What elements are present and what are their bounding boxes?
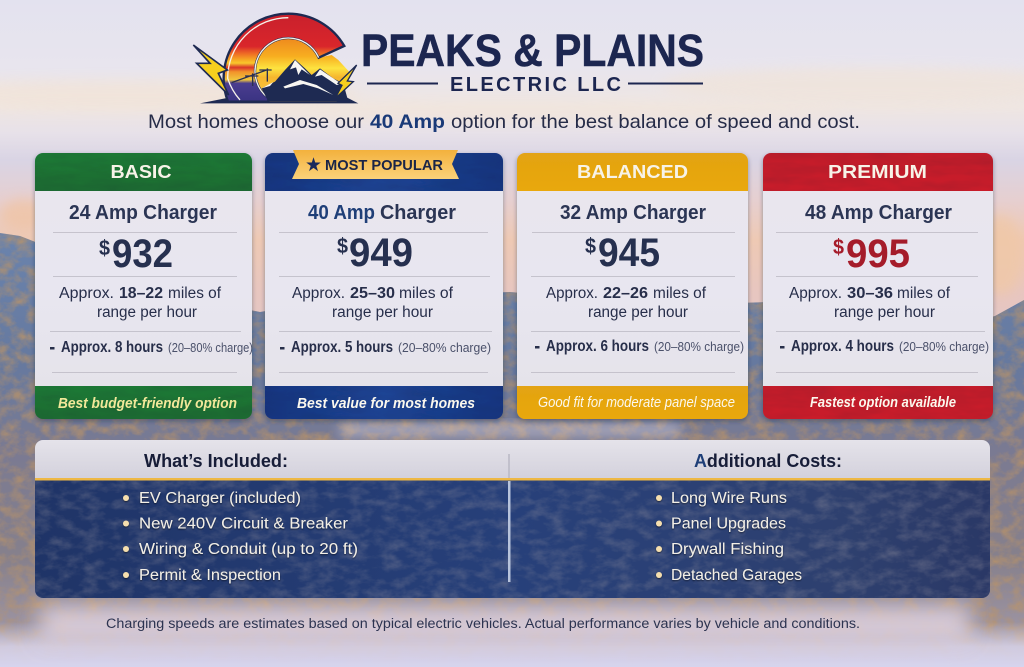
logo sun disc and streak xyxy=(255,38,350,102)
40 amp: text: range per hour xyxy=(332,304,433,321)
subtitle: 40 Amp xyxy=(370,111,445,133)
logo C ring xyxy=(224,14,344,102)
centre divider xyxy=(508,454,510,478)
basic: text: 24 Amp Charger xyxy=(69,202,217,224)
basic: text: 18–22 xyxy=(119,285,163,302)
logo wordmark: ELECTRIC LLC xyxy=(450,74,621,96)
footer band xyxy=(35,386,252,419)
what's included list: Wiring & Conduit (up to 20 ft) xyxy=(139,541,358,558)
what's included heading: What’s Included: xyxy=(144,450,288,471)
subtitle: Most homes choose our xyxy=(148,111,365,133)
premium: text: (20–80% charge) xyxy=(899,340,989,354)
balanced: text: (20–80% charge) xyxy=(654,340,744,354)
logo left lightning bolt xyxy=(193,45,229,95)
basic: text: (20–80% charge) xyxy=(168,341,253,355)
card: basic xyxy=(35,153,252,419)
40 amp: text: 949 xyxy=(349,231,413,275)
gold rule xyxy=(35,478,990,480)
balanced: text: BALANCED xyxy=(577,161,688,182)
logo ring white lines xyxy=(228,18,319,100)
premium: text xyxy=(776,161,989,411)
basic: text: Approx. 8 hours xyxy=(61,339,163,356)
balanced: text: Good fit for moderate panel space xyxy=(538,395,735,411)
premium: text: 995 xyxy=(846,232,910,276)
40 amp: text: Charger xyxy=(380,202,456,224)
card body xyxy=(35,190,252,387)
logo mountains xyxy=(262,59,348,102)
premium: text: 48 Amp Charger xyxy=(805,202,952,224)
what's included list xyxy=(123,490,358,584)
what's included list: EV Charger (included) xyxy=(139,490,301,507)
header band xyxy=(265,153,503,191)
40 amp: text: Approx. 5 hours xyxy=(291,339,393,356)
premium: text: Approx. xyxy=(789,285,842,302)
panel: included and additional costs xyxy=(35,440,990,598)
additional costs list: Long Wire Runs xyxy=(671,490,787,507)
subtitle xyxy=(148,111,860,133)
40 amp: text: Best value for most homes xyxy=(297,396,475,412)
basic: text: Best budget-friendly option xyxy=(58,396,237,412)
additional costs list: Drywall Fishing xyxy=(671,541,784,558)
basic: text xyxy=(50,161,253,412)
logo base wedge xyxy=(200,97,358,103)
40 amp: text: Approx. xyxy=(292,285,345,302)
balanced: text: 22–26 xyxy=(603,285,648,302)
logo power lines xyxy=(232,68,272,86)
premium: text: miles of xyxy=(897,285,951,302)
balanced: text: 32 Amp Charger xyxy=(560,202,706,224)
card body xyxy=(763,190,993,387)
balanced: text: Approx. 6 hours xyxy=(546,338,649,355)
footnote: Charging speeds are estimates based on typical electric vehicles. Actual performance varies by vehicle and conditions. xyxy=(106,616,860,631)
40 amp: text: (20–80% charge) xyxy=(398,341,491,355)
footer band xyxy=(517,386,748,419)
premium: text: 30–36 xyxy=(847,285,893,302)
basic: text: range per hour xyxy=(97,304,197,321)
card body xyxy=(265,190,503,387)
most popular ribbon xyxy=(292,150,459,179)
40 amp: text: 25–30 xyxy=(350,285,395,302)
premium: text: Fastest option available xyxy=(810,395,956,411)
what's included list: Permit & Inspection xyxy=(139,567,281,584)
header band xyxy=(763,153,993,191)
additional costs heading: Additional Costs: xyxy=(694,450,842,471)
additional costs list: Detached Garages xyxy=(671,567,802,584)
card: balanced xyxy=(517,153,748,419)
logo right lightning bolt xyxy=(335,65,357,99)
40 amp: text: $ xyxy=(337,235,348,258)
card: 40 amp most popular xyxy=(265,153,503,419)
40 amp: text: miles of xyxy=(399,285,454,302)
premium: text: $ xyxy=(833,236,844,259)
footer band xyxy=(265,386,503,419)
subtitle: option for the best balance of speed and cost. xyxy=(451,111,860,133)
logo xyxy=(193,14,358,103)
40 amp: text xyxy=(279,202,492,412)
logo wordmark: PEAKS & PLAINS xyxy=(361,25,704,76)
header band xyxy=(35,153,252,191)
what's included list: New 240V Circuit & Breaker xyxy=(139,516,348,532)
premium: text: Approx. 4 hours xyxy=(791,338,894,355)
premium: text: range per hour xyxy=(834,304,935,321)
balanced: text: 945 xyxy=(598,231,660,275)
card: premium xyxy=(763,153,993,419)
basic: text: $ xyxy=(99,237,110,260)
basic: text: 932 xyxy=(112,232,173,276)
footer band xyxy=(763,386,993,419)
most popular ribbon: ★ xyxy=(305,155,322,176)
balanced: text: Approx. xyxy=(546,285,598,302)
header band xyxy=(517,153,748,191)
panel navy body xyxy=(35,480,990,598)
divider glow xyxy=(508,481,510,582)
premium: text: PREMIUM xyxy=(828,161,927,182)
card body xyxy=(517,190,748,387)
balanced: text: range per hour xyxy=(588,304,688,321)
balanced: text: miles of xyxy=(653,285,707,302)
panel header strip xyxy=(35,440,990,479)
40 amp: text: 40 Amp xyxy=(308,202,375,224)
basic: text: Approx. xyxy=(59,285,114,302)
additional costs list: Panel Upgrades xyxy=(671,516,786,532)
additional costs list xyxy=(656,490,802,584)
most popular ribbon: MOST POPULAR xyxy=(325,157,443,174)
balanced: text: $ xyxy=(585,235,596,258)
basic: text: BASIC xyxy=(110,161,172,182)
logo wordmark xyxy=(361,25,704,96)
basic: text: miles of xyxy=(168,285,222,302)
balanced: text xyxy=(531,161,744,411)
